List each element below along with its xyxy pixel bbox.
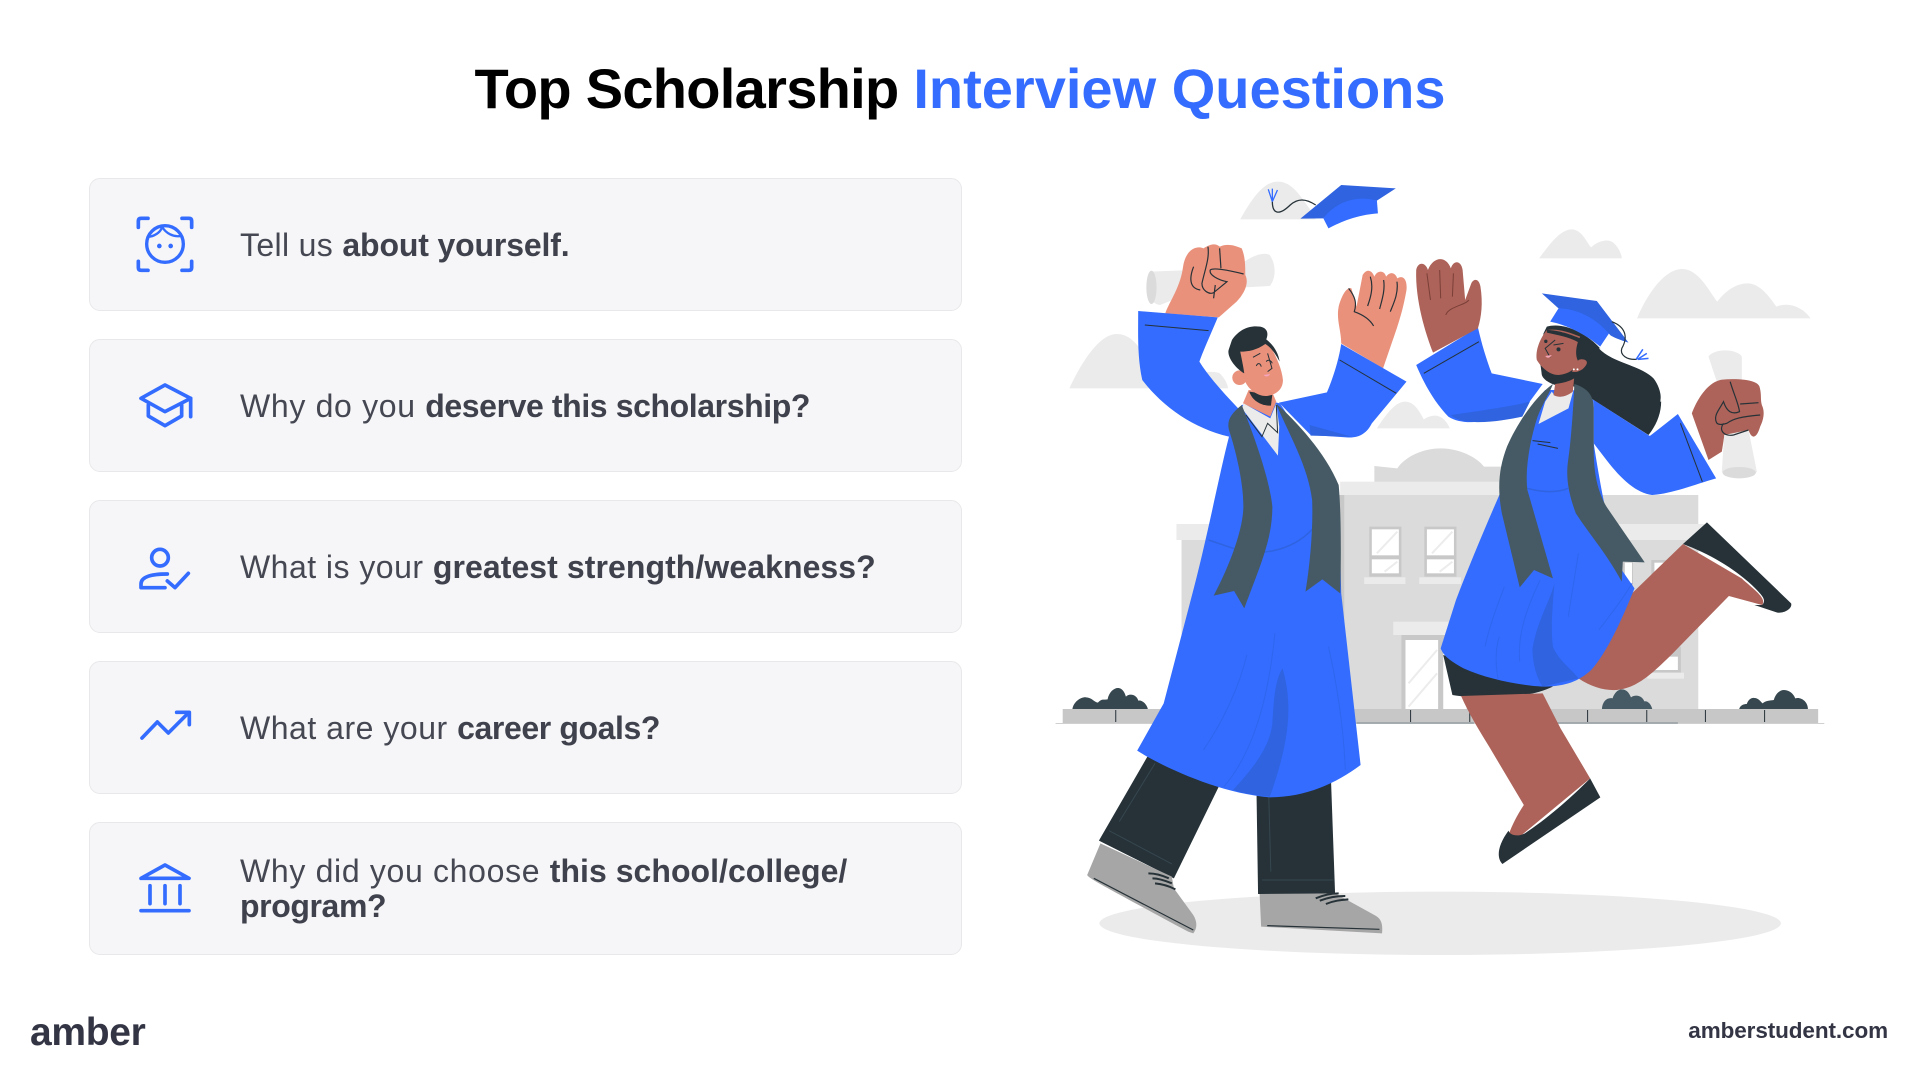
fist [1165, 244, 1247, 317]
title: Top Scholarship Interview Questions [474, 57, 1446, 120]
raised sleeve [1138, 311, 1238, 437]
website: amberstudent.com [1688, 1018, 1888, 1043]
ground shadow [1099, 892, 1781, 955]
hand creases [1191, 247, 1397, 326]
text: question 2: Why do you deserve this scholarship? [240, 388, 810, 424]
building [1176, 448, 1708, 710]
trousers [1099, 757, 1219, 878]
left sleeve [1416, 327, 1543, 422]
bushes [1072, 688, 1808, 709]
icon: person with check [139, 548, 190, 590]
text: question 3: What is your greatest strength/weakness? [240, 548, 876, 584]
hanging shoe [1499, 778, 1600, 864]
icon: graduation cap [139, 383, 193, 428]
logo: amber: amber [30, 1011, 146, 1054]
skirt [1443, 655, 1553, 698]
icon: face scan [136, 216, 194, 272]
text: question 4: What are your career goals? [240, 710, 660, 746]
sidewalk [1056, 709, 1824, 724]
panel: question 4 [89, 661, 962, 794]
gown [1441, 390, 1635, 687]
man graduate [1087, 244, 1407, 933]
gown folds [1532, 583, 1578, 687]
flying graduation cap [1268, 185, 1396, 228]
head, neck and shirt [1228, 326, 1283, 456]
diploma and fist [1538, 350, 1764, 478]
text: question 5: Why did you choose this school/college/ [240, 853, 847, 889]
panel: question 1 [89, 178, 962, 311]
raised shoe [1683, 522, 1791, 613]
high-five sleeve [1279, 344, 1407, 437]
hair and head [1537, 325, 1661, 435]
text: question 5 [240, 853, 847, 924]
clouds [1069, 182, 1811, 428]
hanging leg [1461, 693, 1590, 837]
text: question 1: Tell us about yourself. [240, 226, 570, 262]
raised hand [1416, 259, 1482, 353]
chest and neck [1538, 378, 1574, 424]
panel: question 3 [89, 500, 962, 633]
woman graduate [1416, 259, 1791, 864]
raised leg [1578, 544, 1763, 690]
open hand [1338, 271, 1407, 368]
scarf [1214, 405, 1272, 608]
icon: school building [139, 863, 191, 912]
diploma [1147, 254, 1275, 305]
shoes [1087, 843, 1196, 933]
icon: trending arrow [140, 710, 192, 740]
mortarboard [1542, 293, 1648, 359]
scarf [1499, 384, 1553, 587]
panel: question 5 [89, 822, 962, 955]
gown [1137, 400, 1361, 797]
text: question 5: program? [240, 888, 386, 924]
right sleeve [1594, 400, 1716, 495]
panel: question 2 [89, 339, 962, 472]
